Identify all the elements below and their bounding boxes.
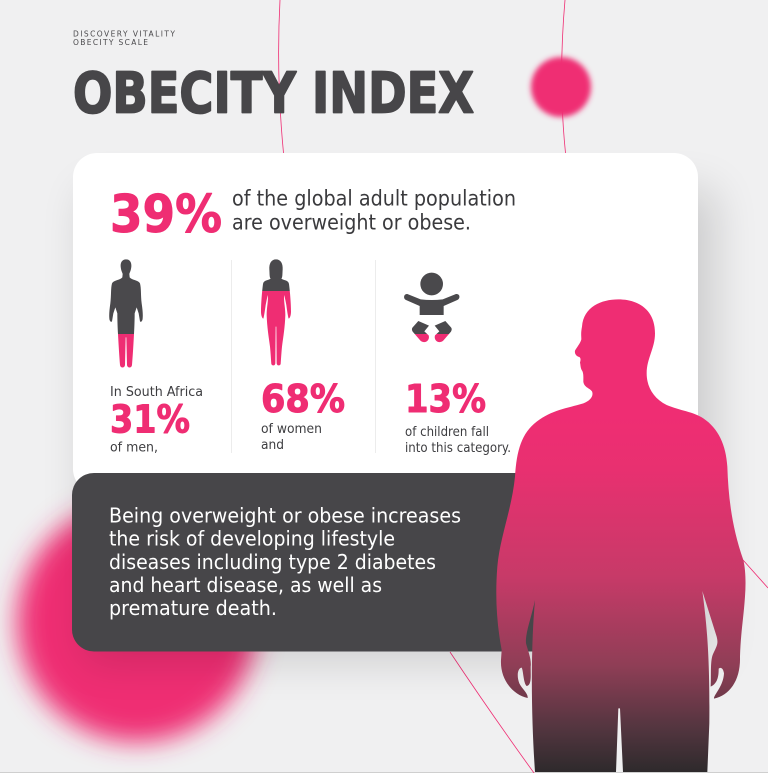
header eyebrow bbox=[73, 30, 175, 47]
children caption: of children fall bbox=[405, 424, 489, 440]
icon: woman bbox=[261, 259, 291, 365]
39 percent figure: 39% bbox=[110, 185, 222, 245]
stat: children bbox=[405, 377, 511, 456]
panel: dark risk callout bbox=[72, 473, 698, 652]
children caption bbox=[405, 424, 511, 456]
men caption: of men, bbox=[110, 440, 158, 456]
risk callout text: Being overweight or obese increases bbox=[109, 504, 461, 528]
icon: man bbox=[109, 259, 143, 367]
children percentage: 13% bbox=[405, 377, 486, 421]
risk callout text bbox=[109, 504, 461, 620]
risk callout text: the risk of developing lifestyle bbox=[109, 526, 395, 550]
thin pink arc lines bbox=[279, 0, 768, 773]
women caption: of women bbox=[261, 421, 322, 437]
blurred pink circle: bottom left bbox=[17, 502, 257, 742]
column dividers bbox=[232, 260, 376, 453]
women percentage: 68% bbox=[261, 377, 345, 421]
large male silhouette bbox=[496, 299, 746, 772]
men percentage: 31% bbox=[110, 398, 190, 442]
women caption: and bbox=[261, 437, 284, 453]
panel: white card bbox=[73, 153, 698, 493]
headline sentence: of the global adult population bbox=[232, 186, 516, 210]
header eyebrow: OBECITY SCALE bbox=[73, 38, 148, 47]
headline sentence: are overweight or obese. bbox=[232, 210, 471, 234]
stat: men bbox=[110, 384, 203, 456]
stat: women bbox=[261, 377, 345, 453]
women caption bbox=[261, 421, 322, 453]
icon: baby bbox=[404, 273, 459, 342]
header eyebrow: DISCOVERY VITALITY bbox=[73, 30, 175, 38]
risk callout text: and heart disease, as well as bbox=[109, 573, 382, 597]
headline statistic bbox=[110, 185, 516, 245]
risk callout text: premature death. bbox=[109, 596, 277, 620]
children caption: into this category. bbox=[405, 440, 511, 456]
blurred pink circle: top bbox=[531, 57, 591, 117]
title: OBECITY INDEX bbox=[73, 62, 474, 126]
bottom edge line bbox=[0, 772, 768, 773]
men intro label: In South Africa bbox=[110, 384, 203, 400]
card shadow bbox=[85, 190, 715, 660]
risk callout text: diseases including type 2 diabetes bbox=[109, 550, 436, 574]
headline sentence bbox=[232, 186, 516, 234]
